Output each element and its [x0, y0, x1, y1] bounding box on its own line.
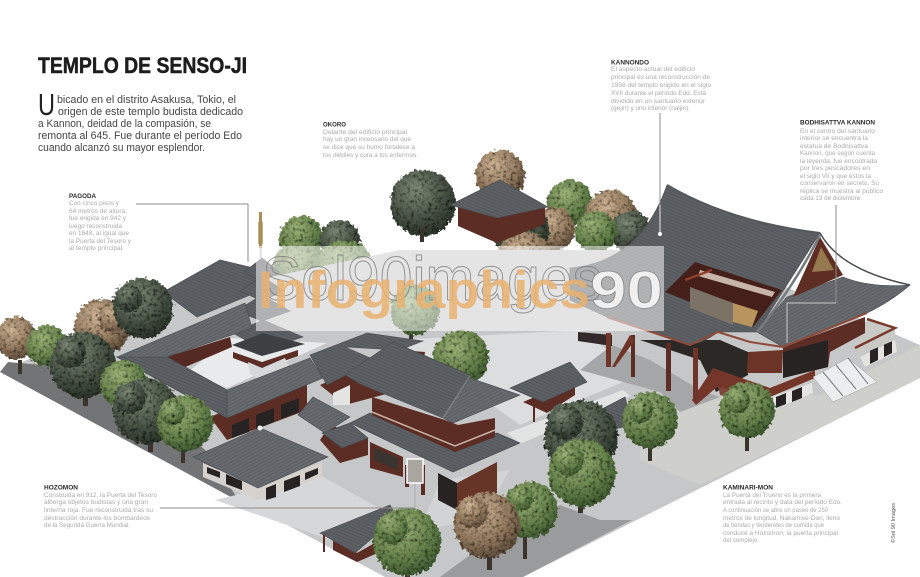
callout: Bodhisattva Kannon: Kannon, que según cuenta — [800, 150, 875, 157]
callout: Hozomon: de la Segunda Guerra Mundial. — [44, 522, 130, 529]
intro paragraph: remonta al 645. Fue durante el período Edo — [38, 130, 242, 142]
callout: Bodhisattva Kannon: la leyenda, fue encontrada — [800, 158, 878, 165]
cutaway interior — [665, 262, 782, 327]
callout: Kannondo — [611, 60, 712, 112]
posts — [606, 333, 698, 400]
pagoda courtyard — [167, 337, 327, 388]
callout: Kannondo: (gejin) y uno interior (naijin). — [611, 105, 690, 112]
balcony — [372, 397, 495, 452]
callout: Bodhisattva Kannon: por tres pescadores en — [800, 165, 871, 172]
building: front small pavilion — [320, 505, 397, 562]
callout: Okoro — [323, 122, 418, 159]
building: Okoro small pavilion — [450, 180, 548, 243]
callout: Okoro: los débiles y cura a los enfermos. — [323, 152, 418, 159]
callout: Bodhisattva Kannon: estatua de Bodhisattva — [800, 143, 869, 150]
callout: Bodhisattva Kannon: BODHISATTVA KANNON — [800, 120, 875, 126]
callout: Bodhisattva Kannon: interior se encuentra la — [800, 135, 869, 142]
porch interior — [578, 332, 748, 392]
callout: Okoro: OKORO — [323, 122, 346, 128]
callout: Okoro: Delante del edificio principal — [323, 129, 407, 136]
ground plaza — [0, 250, 920, 577]
callout: Kannondo: dividido en un santuario exterior — [611, 98, 705, 105]
building: gate side halls — [298, 397, 368, 463]
callout: Okoro: hay un gran incensario del que — [323, 136, 412, 143]
callout: Kannondo: El aspecto actual del edificio — [611, 66, 696, 73]
stairs — [813, 358, 877, 402]
gable — [793, 237, 843, 297]
callout: Kannondo: principal es una reconstrucción de — [611, 74, 711, 81]
building: right pavilion — [510, 362, 632, 430]
callout: Bodhisattva Kannon: En el centro del santuario — [800, 128, 876, 135]
callout: Hozomon: HOZOMON — [44, 484, 78, 492]
porch steps — [580, 345, 720, 412]
callout: Kaminari-mon: KAMINARI-MON — [723, 484, 773, 492]
callout: Pagoda: en 1648, al igual que — [69, 230, 129, 237]
callout: Kaminari-mon: de tiendas y tenderetes de comida que — [723, 522, 824, 529]
callout: Pagoda: al templo principal. — [69, 245, 124, 252]
callout: Kannondo: KANNONDO — [611, 60, 649, 66]
callout: Pagoda: Con cinco pisos y — [69, 200, 120, 207]
callout: Pagoda: la Puerta del Tesoro y — [69, 238, 132, 245]
icon: pagoda — [232, 212, 305, 384]
intro paragraph: U — [38, 87, 55, 122]
callout: Kaminari-mon: metros de longitud, Nakamise-Dori, lleno — [723, 515, 841, 522]
callout: Bodhisattva Kannon — [800, 120, 884, 202]
callout: Kaminari-mon: A continuación se abre un paseo de 250 — [723, 507, 828, 514]
building: rear pagoda wing — [163, 260, 262, 317]
callout: Pagoda: fue erigida en 942 y — [69, 215, 127, 222]
intro paragraph: origen de este templo budista dedicado — [58, 106, 243, 118]
leader lines — [136, 113, 836, 508]
watermark: 90 — [590, 261, 663, 320]
callout: Okoro: se dice que su humo fortalece a — [323, 144, 416, 151]
building: side hall — [310, 333, 425, 405]
tree: courtyard — [390, 285, 489, 386]
callout: Bodhisattva Kannon: réplica se muestra al público — [800, 188, 884, 195]
main roof — [570, 185, 820, 345]
right hip roof — [757, 277, 910, 347]
callout: Pagoda — [69, 193, 132, 252]
intro paragraph: a Kannon, deidad de la compasión, se — [38, 118, 211, 130]
callout: Bodhisattva Kannon: conservaron en secreto. Su — [800, 180, 879, 187]
back trees — [272, 150, 652, 300]
intro paragraph: cuando alcanzó su mayor esplendor. — [38, 142, 205, 154]
building: cloister corner — [117, 303, 323, 440]
side bay wall — [370, 442, 403, 477]
callout: Kannondo: 1958 del templo erigido en el siglo — [611, 82, 712, 89]
callout: Hozomon: alberga objetos budistas y una gran — [44, 499, 149, 506]
callout: Pagoda: PAGODA — [69, 193, 96, 200]
building: Hozomon main gate — [345, 342, 520, 510]
callout: Pagoda: 64 metros de altura, — [69, 208, 127, 215]
building: Kannondo — [570, 185, 910, 412]
callout: Hozomon: destrucción durante los bombardeos — [44, 515, 150, 522]
building: lower-left pavilion — [193, 426, 328, 500]
barge boards — [607, 185, 910, 347]
base — [692, 368, 815, 410]
callout: Kaminari-mon: conduce a Hozomon, la puerta principal — [723, 530, 838, 537]
trees: left row — [0, 278, 213, 463]
callout: Pagoda: luego reconstruida — [69, 223, 123, 230]
callout: Kaminari-mon: entrada al recinto y data del período Edo. — [723, 499, 842, 506]
callout: Bodhisattva Kannon: el siglo VII y que éstos la — [800, 173, 872, 180]
lower roof — [350, 413, 520, 472]
watermark: Infographics — [258, 261, 590, 320]
callout: Bodhisattva Kannon: cada 13 de diciembre. — [800, 195, 862, 202]
title: TEMPLO DE SENSO-JI — [38, 53, 247, 78]
trees: front row — [373, 382, 775, 577]
upper roof — [345, 342, 470, 418]
callout: Kaminari-mon: del complejo. — [723, 537, 759, 544]
upper right roof — [443, 378, 520, 423]
corner wall — [747, 350, 783, 373]
intro paragraph: bicado en el distrito Asakusa, Tokio, el — [57, 94, 236, 106]
callout: Kaminari-mon — [723, 484, 842, 544]
intro paragraph — [38, 87, 243, 154]
callout: Hozomon — [44, 484, 157, 529]
callout: Hozomon: linterna roja. Fue reconstruida tras su — [44, 507, 154, 514]
illustration: temple complex — [0, 150, 920, 577]
callout: Hozomon: Construida en 912, la Puerta del Tesoro — [44, 492, 157, 499]
watermark: Sol90images — [262, 245, 602, 314]
callout: Kannondo: XVII durante el período Edo. Está — [611, 90, 706, 97]
credit: ©Sol 90 Images — [890, 503, 897, 543]
callout: Kaminari-mon: La Puerta del Trueno es la primera — [723, 492, 821, 499]
terrace — [855, 319, 897, 367]
right wall — [783, 317, 865, 378]
